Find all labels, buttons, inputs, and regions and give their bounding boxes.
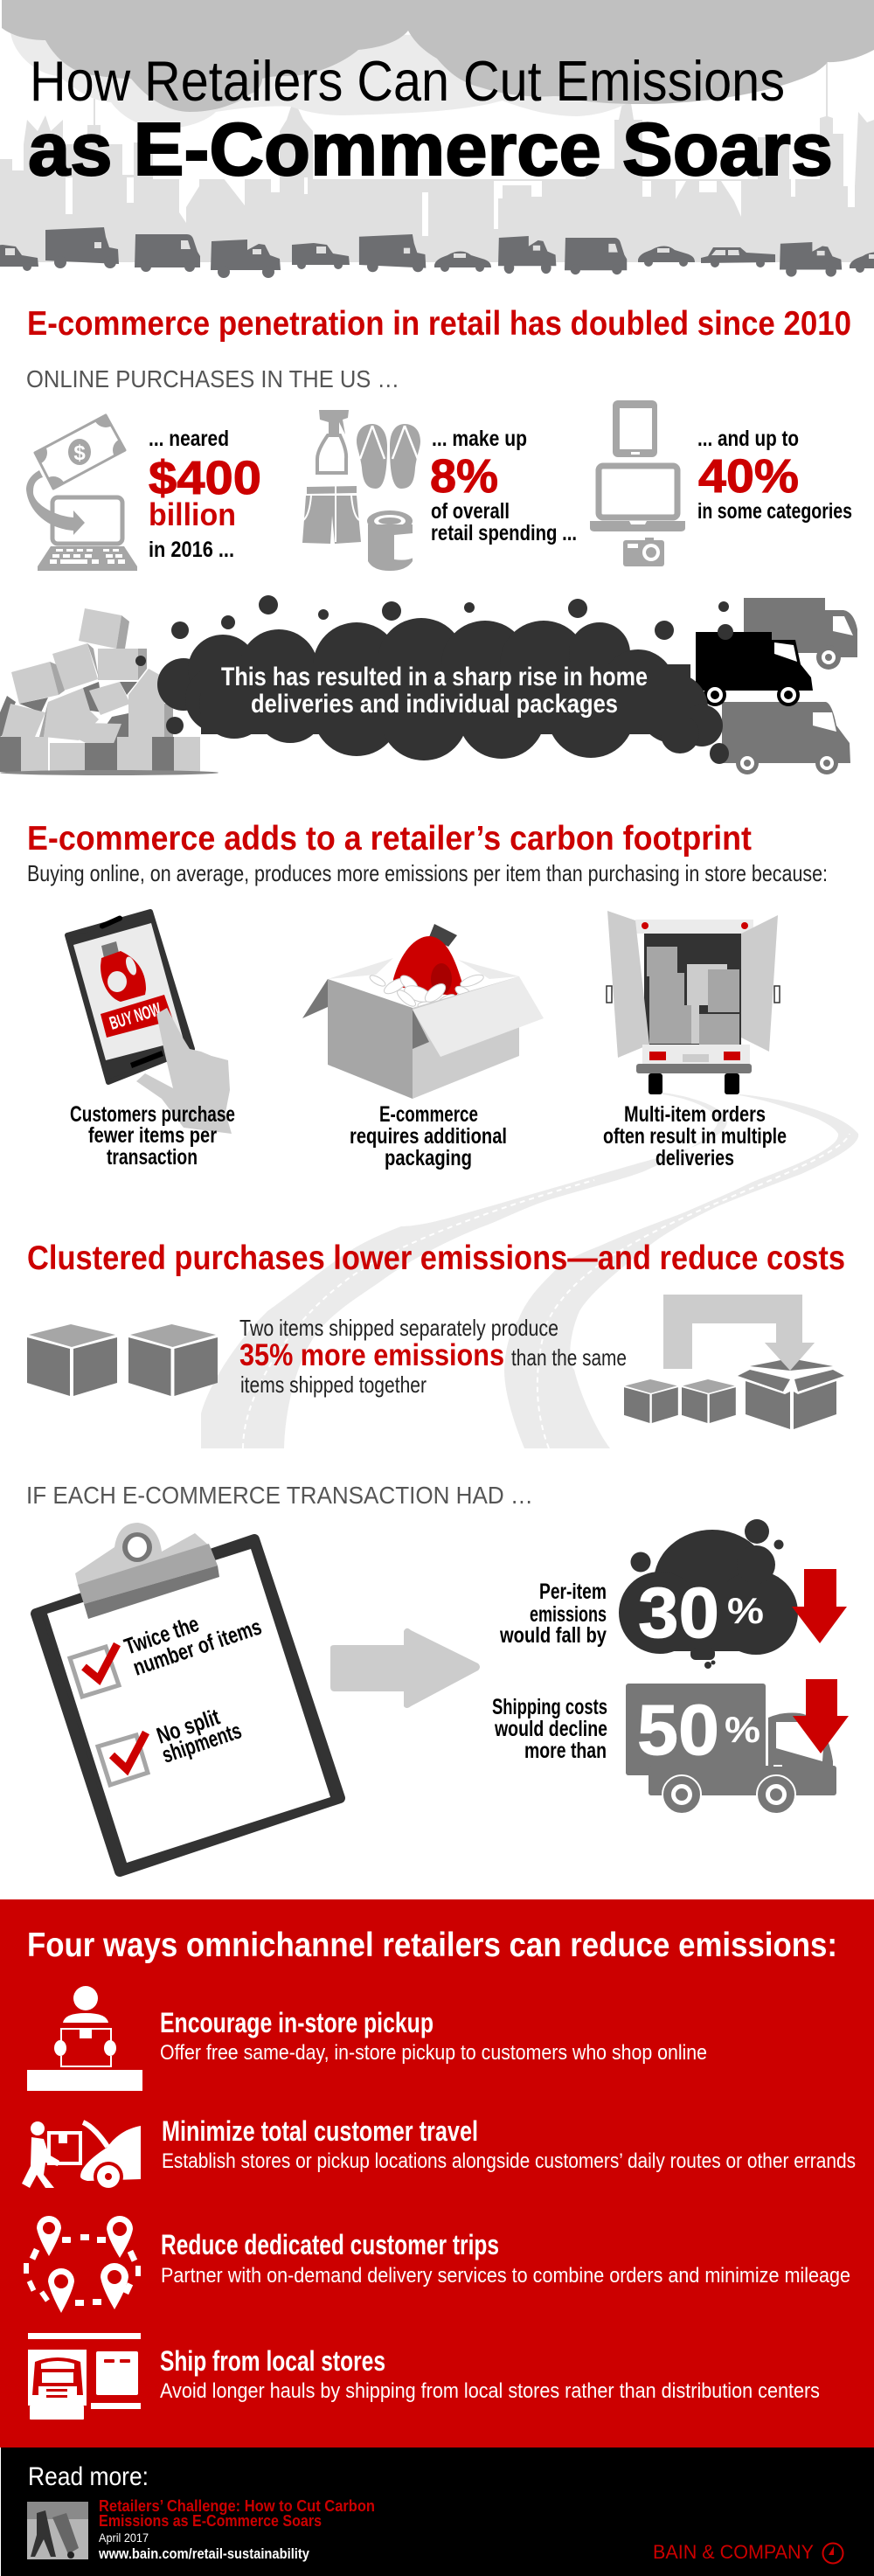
- text: 35 percent more emissions: Two items shipped separately produce: [239, 1315, 558, 1341]
- subheading: online purchases: ONLINE PURCHASES IN THE US …: [26, 365, 399, 392]
- report date: April 2017: [99, 2531, 149, 2545]
- reason: multiple deliveries: [603, 911, 787, 1170]
- icon: smoke cloud: [619, 1519, 798, 1669]
- packing peanuts: [368, 973, 485, 1010]
- result: per-item emissions: would fall by: [499, 1623, 607, 1648]
- icon: electronics: [590, 400, 685, 566]
- way: in-store pickup: Offer free same-day, in-store pickup to customers who shop online: [160, 2041, 707, 2065]
- arrow down: [793, 1679, 849, 1753]
- stat: 400 billion: ... neared: [149, 427, 229, 451]
- stat: 8 percent: retail spending ...: [431, 521, 577, 545]
- reason: fewer items per transaction: [67, 912, 235, 1170]
- stat: 8 percent: 8%: [430, 450, 498, 503]
- reason: multiple deliveries: deliveries: [656, 1146, 734, 1170]
- way: local stores: [28, 2333, 820, 2420]
- stat: 8 percent: [302, 410, 577, 571]
- reason: fewer items per transaction: Customers purchase: [70, 1102, 235, 1127]
- reason: fewer items per transaction: transaction: [107, 1145, 198, 1170]
- reason: additional packaging: E-commerce: [379, 1102, 478, 1127]
- stat: 40 percent: [590, 400, 852, 566]
- soot puffs: [135, 595, 733, 734]
- title: as E-Commerce Soars: [28, 108, 833, 191]
- clipboard checklist: [36, 1523, 340, 1871]
- way: minimize travel: Minimize total customer travel: [162, 2115, 478, 2147]
- text: 35 percent more emissions: than the same: [511, 1344, 627, 1371]
- arrow: result: [330, 1628, 480, 1708]
- stat: 400 billion: $400: [149, 452, 261, 504]
- traffic row of vehicles: [0, 227, 874, 278]
- icon: open box with bottle: [302, 924, 544, 1099]
- reason: additional packaging: requires additional: [350, 1124, 507, 1149]
- way: dedicated trips: [24, 2216, 850, 2313]
- checkbox one: [70, 1644, 119, 1697]
- checklist text two: No split: [153, 1704, 223, 1749]
- icon: money into laptop: $: [73, 441, 86, 465]
- icon: truck at store: [28, 2333, 141, 2420]
- text: 35 percent more emissions: 35% more emissions: [239, 1338, 504, 1372]
- reason: additional packaging: packaging: [385, 1146, 472, 1170]
- icon: delivery truck: [626, 1684, 836, 1814]
- icon: truck with open doors: [607, 911, 780, 1094]
- stat: 40 percent: 40%: [698, 450, 799, 503]
- result: per-item emissions: Per-item: [539, 1580, 607, 1604]
- icon: phone with buy now: [67, 912, 232, 1134]
- report url: www.bain.com/retail-sustainability: [98, 2545, 309, 2562]
- reason: multiple deliveries: often result in multiple: [603, 1124, 787, 1149]
- checklist text two: shipments: [158, 1717, 245, 1768]
- smoke cloud with message: [135, 595, 733, 764]
- text: 35 percent more emissions: [239, 1315, 627, 1398]
- checklist text one: number of items: [129, 1613, 265, 1681]
- smoke cloud with message: This has resulted in a sharp rise in home: [221, 663, 648, 691]
- icon: clerk at counter: [27, 1986, 142, 2091]
- logo: bain and company: BAIN & COMPANY: [653, 2541, 814, 2563]
- icon: two separate boxes: [27, 1324, 218, 1396]
- icon: person loading car: [22, 2121, 141, 2191]
- stat: 8 percent: ... make up: [432, 427, 527, 451]
- checklist text two: [153, 1704, 245, 1768]
- report title: Emissions as E-Commerce Soars: [99, 2512, 322, 2530]
- reason: multiple deliveries: Multi-item orders: [624, 1102, 766, 1127]
- icon: route pins: [24, 2216, 141, 2313]
- heading: carbon footprint: E-commerce adds to a retailer’s carbon footprint: [27, 820, 752, 858]
- panel: four ways: [0, 1899, 874, 2448]
- icon: money into laptop: [23, 403, 137, 571]
- title: [28, 49, 833, 191]
- tire tracks background: [201, 1093, 858, 1448]
- result: shipping costs: %: [725, 1709, 760, 1750]
- report title: Retailers’ Challenge: How to Cut Carbon: [99, 2497, 375, 2515]
- footer: [1, 2448, 874, 2576]
- stat: 400 billion: in 2016 ...: [149, 538, 234, 562]
- result: shipping costs: would decline: [494, 1717, 607, 1741]
- thumbnail photo: [27, 2502, 88, 2559]
- way: in-store pickup: Encourage in-store pickup: [160, 2007, 434, 2038]
- read more: Read more:: [28, 2462, 149, 2491]
- clipboard board: [36, 1539, 340, 1871]
- result: shipping costs: 50: [637, 1691, 719, 1770]
- clip: [75, 1523, 219, 1619]
- back truck: [744, 598, 857, 670]
- stat: 400 billion: billion: [149, 496, 236, 532]
- black truck: [696, 632, 813, 706]
- result: per-item emissions: [499, 1519, 847, 1669]
- stat: 400 billion: [23, 403, 261, 571]
- icon: retail goods: [302, 410, 420, 571]
- stat: 8 percent: of overall: [431, 499, 510, 524]
- result: per-item emissions: 30: [638, 1573, 719, 1653]
- pile of boxes: [0, 608, 218, 775]
- result: shipping costs: more than: [524, 1739, 607, 1763]
- smoke cloud with message: deliveries and individual packages: [251, 690, 618, 719]
- delivery vehicles: [696, 598, 857, 774]
- way: local stores: Avoid longer hauls by shipping from local stores rather than distribution centers: [160, 2379, 820, 2403]
- subheading: if each transaction had: IF EACH E-COMMERCE TRANSACTION HAD …: [26, 1482, 533, 1509]
- header background: skyline and clouds: [0, 0, 874, 262]
- checklist text one: Twice the: [121, 1610, 202, 1660]
- result: per-item emissions: %: [727, 1590, 764, 1631]
- stat: 40 percent: ... and up to: [697, 427, 799, 451]
- checklist text one: [121, 1610, 265, 1681]
- way: minimize travel: [22, 2115, 856, 2191]
- way: in-store pickup: [27, 1986, 707, 2091]
- arrow down: [792, 1569, 847, 1643]
- arrow into box: [663, 1295, 815, 1371]
- way: dedicated trips: Reduce dedicated customer trips: [161, 2229, 499, 2260]
- result: shipping costs: [492, 1679, 849, 1814]
- report title: [99, 2497, 375, 2530]
- way: local stores: Ship from local stores: [160, 2345, 385, 2377]
- text: 35 percent more emissions: items shipped together: [240, 1371, 427, 1398]
- open box: [738, 1358, 844, 1429]
- title: How Retailers Can Cut Emissions: [30, 49, 785, 113]
- front van: [722, 702, 850, 774]
- reason: additional packaging: [302, 924, 544, 1170]
- reason: fewer items per transaction: fewer items per: [88, 1123, 217, 1148]
- result: shipping costs: Shipping costs: [492, 1695, 607, 1719]
- icon: phone with buy now: BUY NOW: [108, 999, 163, 1034]
- icon: boxes consolidated into one: [624, 1295, 844, 1429]
- checkbox two: [98, 1732, 148, 1785]
- result: per-item emissions: emissions: [530, 1602, 607, 1627]
